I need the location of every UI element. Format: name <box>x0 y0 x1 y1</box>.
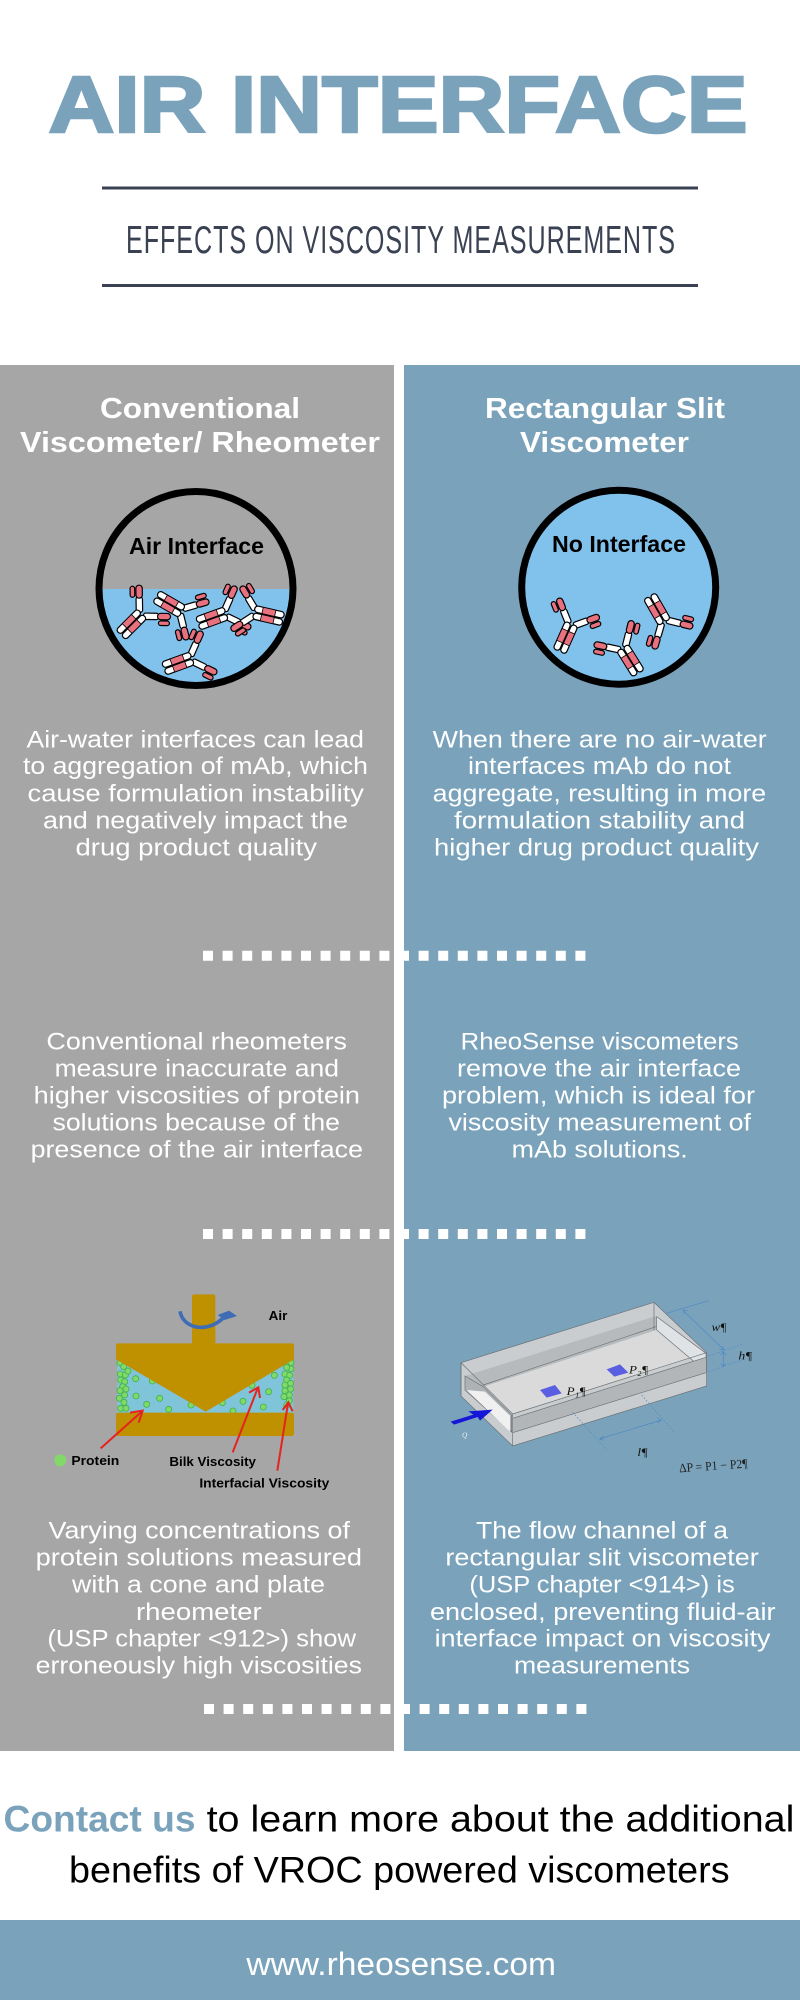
diagram: cone and plate rheometer: Protein <box>71 1454 119 1468</box>
subtitle with rules <box>102 186 698 287</box>
text block: flow channel: (USP chapter <914>) is <box>469 1572 735 1599</box>
text block: air-water interfaces: drug product quality <box>76 834 317 861</box>
text block: cone and plate: with a cone and plate <box>71 1572 325 1599</box>
call to action: benefits of VROC powered viscometers <box>69 1850 730 1891</box>
text block: air-water interfaces: cause formulation instability <box>28 780 364 807</box>
text block: cone and plate: rheometer <box>136 1599 262 1626</box>
text block: conventional rheometers: solutions because of the <box>52 1110 340 1137</box>
diagram: cone and plate rheometer: Air <box>269 1309 287 1323</box>
text block: no air-water interfaces <box>433 726 767 861</box>
call to action <box>4 1799 794 1891</box>
panel: rectangular slit viscometer <box>404 365 800 1751</box>
heading: conventional viscometer / rheometer: Viscometer/ Rheometer <box>20 427 380 459</box>
heading: conventional viscometer / rheometer: Conventional <box>100 393 300 425</box>
icon: air interface circle with antibodies: Air Interface <box>129 533 264 559</box>
diagram: rectangular slit channel: ΔP = P1 − P2¶ <box>679 1457 748 1475</box>
heading: rectangular slit viscometer: Rectangular Slit <box>485 393 725 425</box>
text block: no air-water interfaces: When there are no air-water <box>433 726 767 753</box>
diagram: rectangular slit channel: l¶ <box>637 1445 648 1459</box>
heading: conventional viscometer / rheometer <box>20 393 380 459</box>
text block: rheosense viscometers: RheoSense viscometers <box>461 1028 739 1055</box>
text block: rheosense viscometers: viscosity measurement of <box>448 1110 751 1137</box>
diagram: rectangular slit channel: h¶ <box>738 1348 752 1362</box>
diagram: rectangular slit channel: P₂¶ <box>628 1362 648 1376</box>
text block: air-water interfaces: and negatively impact the <box>43 808 348 835</box>
text block: flow channel: enclosed, preventing fluid-air <box>430 1599 776 1626</box>
text block: cone and plate: erroneously high viscosities <box>36 1652 362 1679</box>
text block: air-water interfaces <box>23 726 368 861</box>
heading: rectangular slit viscometer <box>485 393 725 459</box>
text block: flow channel <box>430 1517 776 1679</box>
diagram: rectangular slit channel: Q <box>462 1430 468 1439</box>
dotted divider 3 <box>204 1704 587 1714</box>
text block: no air-water interfaces: formulation stability and <box>454 808 745 835</box>
text block: conventional rheometers: higher viscosities of protein <box>34 1082 360 1109</box>
text block: flow channel: The flow channel of a <box>476 1517 729 1544</box>
text block: flow channel: interface impact on viscosity <box>435 1626 770 1653</box>
panel: conventional viscometer <box>0 365 394 1751</box>
dotted divider 2 <box>203 1229 586 1239</box>
heading: rectangular slit viscometer: Viscometer <box>520 427 689 459</box>
text block: conventional rheometers: Conventional rheometers <box>46 1028 347 1055</box>
text block: conventional rheometers: measure inaccurate and <box>55 1056 339 1083</box>
icon: no interface circle with antibodies: No Interface <box>552 531 686 557</box>
dotted divider 1 <box>203 951 586 961</box>
text block: conventional rheometers: presence of the air interface <box>31 1136 363 1163</box>
text block: cone and plate: Varying concentrations of <box>48 1517 350 1544</box>
icon: no interface circle with antibodies <box>522 490 716 688</box>
text block: conventional rheometers <box>31 1028 363 1163</box>
text block: flow channel: measurements <box>514 1652 690 1679</box>
text block: rheosense viscometers: problem, which is ideal for <box>442 1082 755 1109</box>
text block: no air-water interfaces: higher drug product quality <box>434 834 759 861</box>
text block: air-water interfaces: to aggregation of mAb, which <box>23 753 368 780</box>
text block: cone and plate: protein solutions measured <box>36 1545 362 1572</box>
footer band <box>0 1920 800 2000</box>
text block: no air-water interfaces: interfaces mAb do not <box>468 753 731 780</box>
diagram: cone and plate rheometer <box>54 1294 329 1491</box>
call to action: Contact us <box>4 1799 196 1840</box>
icon: air interface circle with antibodies <box>90 492 302 695</box>
text block: rheosense viscometers: mAb solutions. <box>512 1136 688 1163</box>
text block: flow channel: rectangular slit viscometer <box>445 1545 759 1572</box>
text block: rheosense viscometers <box>442 1028 755 1163</box>
text block: cone and plate <box>36 1517 362 1679</box>
text block: no air-water interfaces: aggregate, resulting in more <box>433 780 766 807</box>
call to action: to learn more about the additional <box>207 1799 794 1840</box>
text block: cone and plate: (USP chapter <912>) show <box>47 1626 357 1653</box>
text block: air-water interfaces: Air-water interfaces can lead <box>26 726 364 753</box>
footer url: www.rheosense.com <box>245 1946 556 1982</box>
diagram: rectangular slit channel <box>451 1301 752 1475</box>
title: AIR INTERFACE <box>48 60 748 149</box>
diagram: cone and plate rheometer: Bilk Viscosity <box>169 1455 256 1469</box>
text block: rheosense viscometers: remove the air interface <box>457 1056 741 1083</box>
diagram: rectangular slit channel: P₁¶ <box>566 1384 586 1398</box>
diagram: rectangular slit channel: w¶ <box>712 1320 727 1334</box>
diagram: cone and plate rheometer: Interfacial Viscosity <box>199 1477 329 1491</box>
